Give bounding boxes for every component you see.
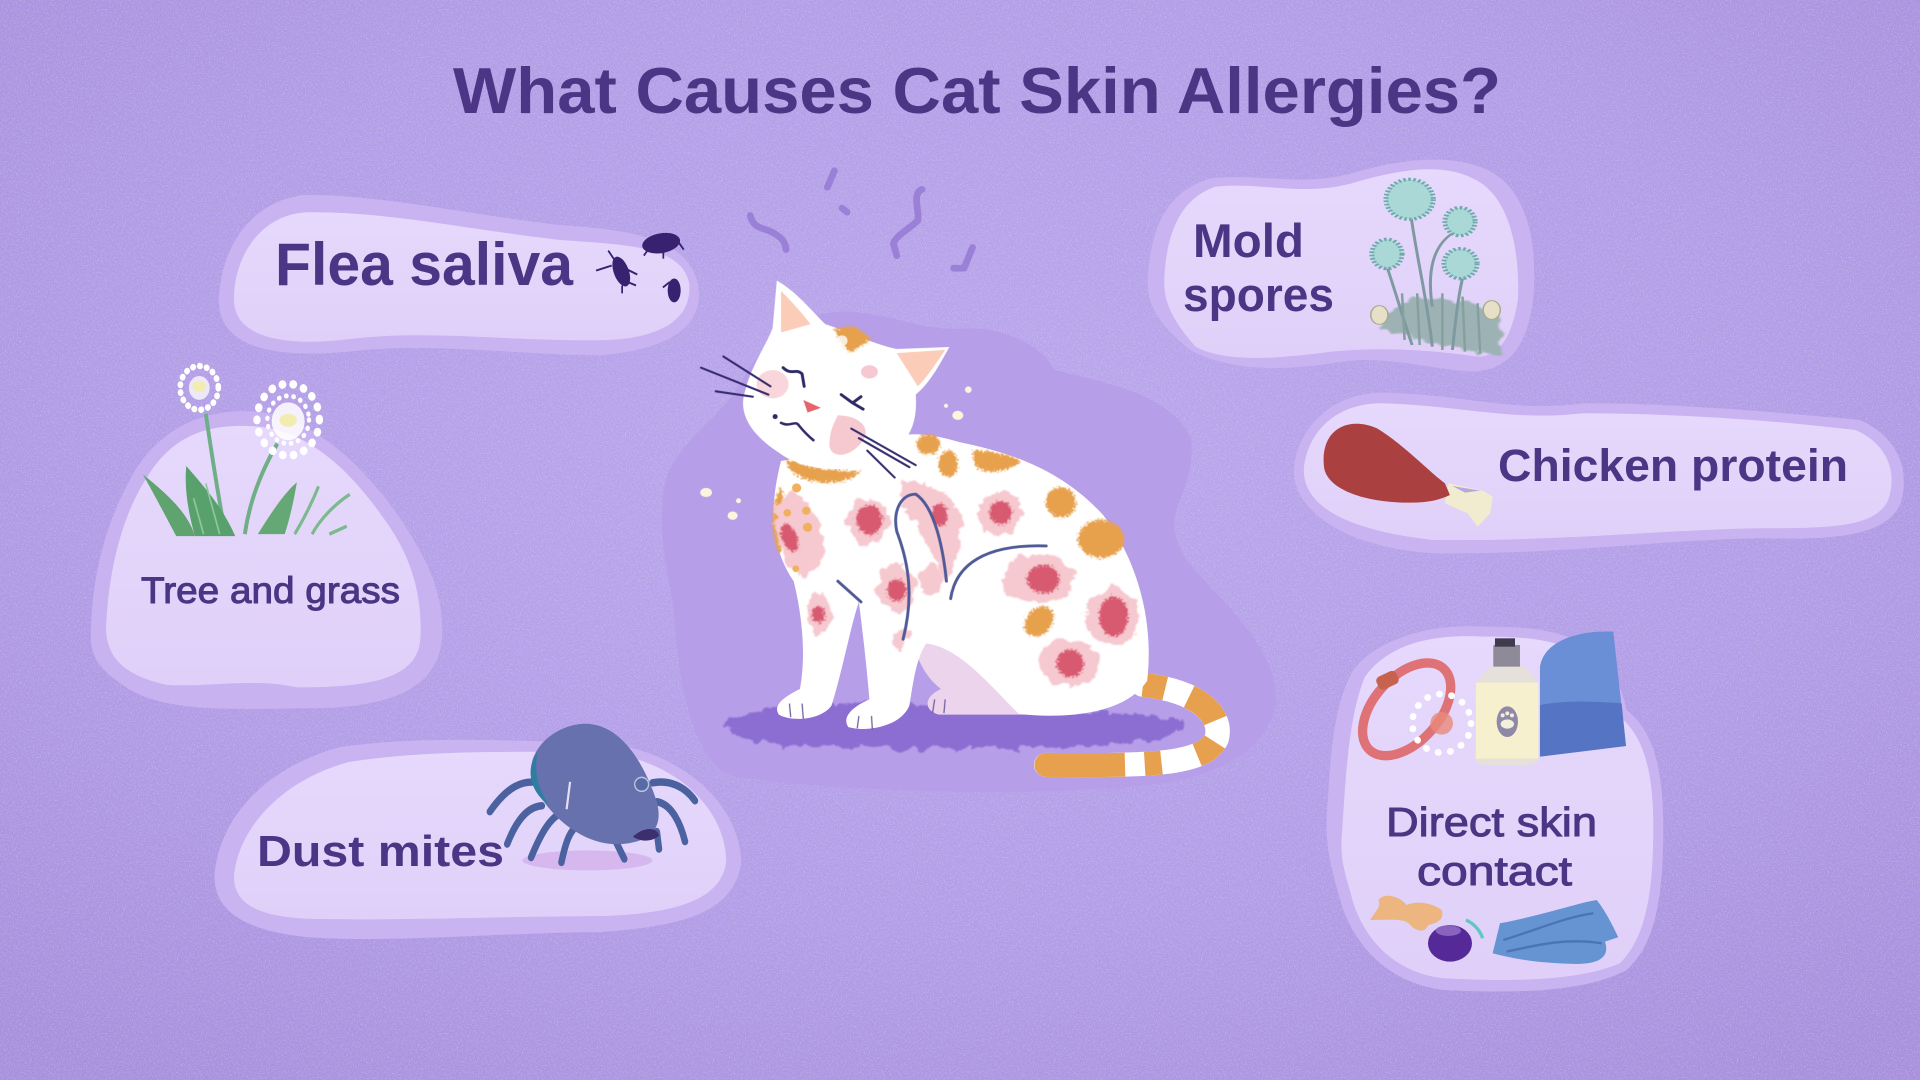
body lines: [838, 494, 1046, 639]
label: flea saliva: Flea saliva: [275, 231, 574, 298]
icon: folded towel: [1493, 900, 1618, 964]
allergy squiggles: [750, 171, 973, 268]
cat backdrop blob: [662, 312, 1276, 792]
label: mold spores: Mold: [1193, 214, 1304, 267]
label: direct skin contact: Direct skin: [1386, 799, 1597, 845]
icon: grass and dandelions: [143, 366, 350, 536]
orange patches: [773, 434, 1124, 642]
icon: chicken drumstick: [1324, 424, 1493, 527]
panel: mold spores: [1148, 160, 1534, 372]
panel: chicken protein: [1294, 393, 1904, 553]
icon: blue bag: [1540, 632, 1626, 757]
icon: purple ball: [1428, 925, 1472, 962]
label: direct skin contact: contact: [1417, 848, 1573, 894]
label: chicken protein: Chicken protein: [1498, 440, 1848, 491]
icon: collar: [1346, 647, 1471, 772]
icon: fleas: [596, 230, 684, 302]
cat head: [701, 281, 949, 478]
hind foot and belly: [909, 618, 1061, 715]
floor shadow: [720, 703, 1184, 749]
whiskers: [701, 356, 916, 478]
label: tree and grass: Tree and grass: [141, 570, 400, 611]
panel: flea saliva: [219, 195, 699, 355]
icon: mold: [1371, 179, 1500, 355]
cat body: [774, 434, 1149, 729]
label: direct skin contact: [1386, 799, 1597, 894]
icon: teal chew: [1466, 920, 1483, 938]
icon: dust mite: [490, 724, 695, 870]
label: mold spores: [1183, 214, 1334, 321]
title: What Causes Cat Skin Allergies?: [453, 54, 1501, 127]
panel: dust mites: [214, 724, 741, 939]
tail: [1034, 685, 1218, 777]
icon: bone treats: [1370, 896, 1442, 931]
cat illustration: [662, 171, 1276, 792]
panel: tree and grass: [91, 366, 442, 709]
label: dust mites: Dust mites: [257, 827, 504, 876]
skin lesions: [775, 481, 1140, 685]
white dander specks: [700, 386, 972, 520]
cat paws: [789, 699, 945, 730]
panel: direct skin contact: [1326, 626, 1663, 992]
icon: shampoo bottle: [1475, 638, 1538, 765]
label: mold spores: spores: [1183, 268, 1334, 321]
